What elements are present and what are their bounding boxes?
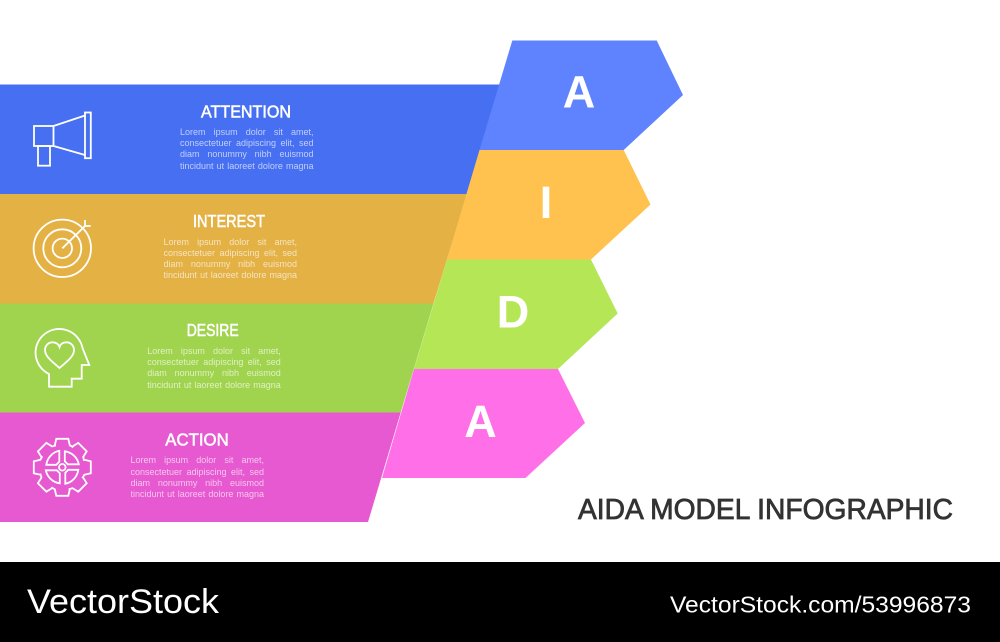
text block: interest <box>164 237 298 283</box>
panel: interest <box>0 194 467 304</box>
icon: gear <box>34 439 91 496</box>
arrow: letter D desire: D <box>497 286 529 338</box>
arrow: letter A attention <box>480 40 683 150</box>
panel: action <box>0 412 401 522</box>
text block: interest: consectetuer adipiscing elit, sed <box>164 248 297 258</box>
text block: desire: Lorem ipsum dolor sit amet, <box>147 346 281 356</box>
arrow: letter A attention: A <box>563 66 595 118</box>
footer bar <box>0 562 1000 642</box>
title: AIDA MODEL INFOGRAPHIC <box>578 494 953 526</box>
text block: desire: tincidunt ut laoreet dolore magna <box>147 380 281 390</box>
icon: head with heart <box>36 329 89 387</box>
text block: action: consectetuer adipiscing elit, sed <box>130 467 264 477</box>
heading: interest: INTEREST <box>193 211 265 231</box>
text block: interest: Lorem ipsum dolor sit amet, <box>164 237 297 247</box>
text block: desire: consectetuer adipiscing elit, sed <box>147 357 281 367</box>
text block: action: Lorem ipsum dolor sit amet, <box>130 455 264 465</box>
text block: attention: tincidunt ut laoreet dolore magna <box>180 161 314 171</box>
text block: interest: tincidunt ut laoreet dolore magna <box>164 270 297 280</box>
heading: action: ACTION <box>165 430 229 450</box>
panel: attention <box>0 84 500 194</box>
icon: target <box>34 220 91 277</box>
arrow: letter A action: A <box>464 396 497 447</box>
text block: attention: diam nonummy nibh euismod <box>180 149 314 159</box>
text block: action: diam nonummy nibh euismod <box>130 478 264 488</box>
text block: attention <box>180 127 314 173</box>
footer url: VectorStock.com/53996873 <box>670 592 971 618</box>
panel: desire <box>0 304 434 412</box>
footer logo: VectorStock <box>27 583 220 621</box>
arrow: letter I interest: I <box>540 177 552 228</box>
text block: desire: diam nonummy nibh euismod <box>147 368 281 378</box>
text block: action <box>130 455 264 501</box>
arrow: letter A action <box>382 369 585 478</box>
text block: action: tincidunt ut laoreet dolore magna <box>130 489 264 499</box>
text block: attention: Lorem ipsum dolor sit amet, <box>180 127 314 137</box>
arrow: letter D desire <box>414 260 618 369</box>
text block: desire <box>147 346 281 392</box>
text block: attention: consectetuer adipiscing elit, sed <box>180 138 314 148</box>
icon: megaphone <box>34 112 91 166</box>
text block: interest: diam nonummy nibh euismod <box>164 259 297 269</box>
heading: attention: ATTENTION <box>201 101 291 121</box>
arrow: letter I interest <box>447 150 650 260</box>
heading: desire: DESIRE <box>187 320 239 340</box>
